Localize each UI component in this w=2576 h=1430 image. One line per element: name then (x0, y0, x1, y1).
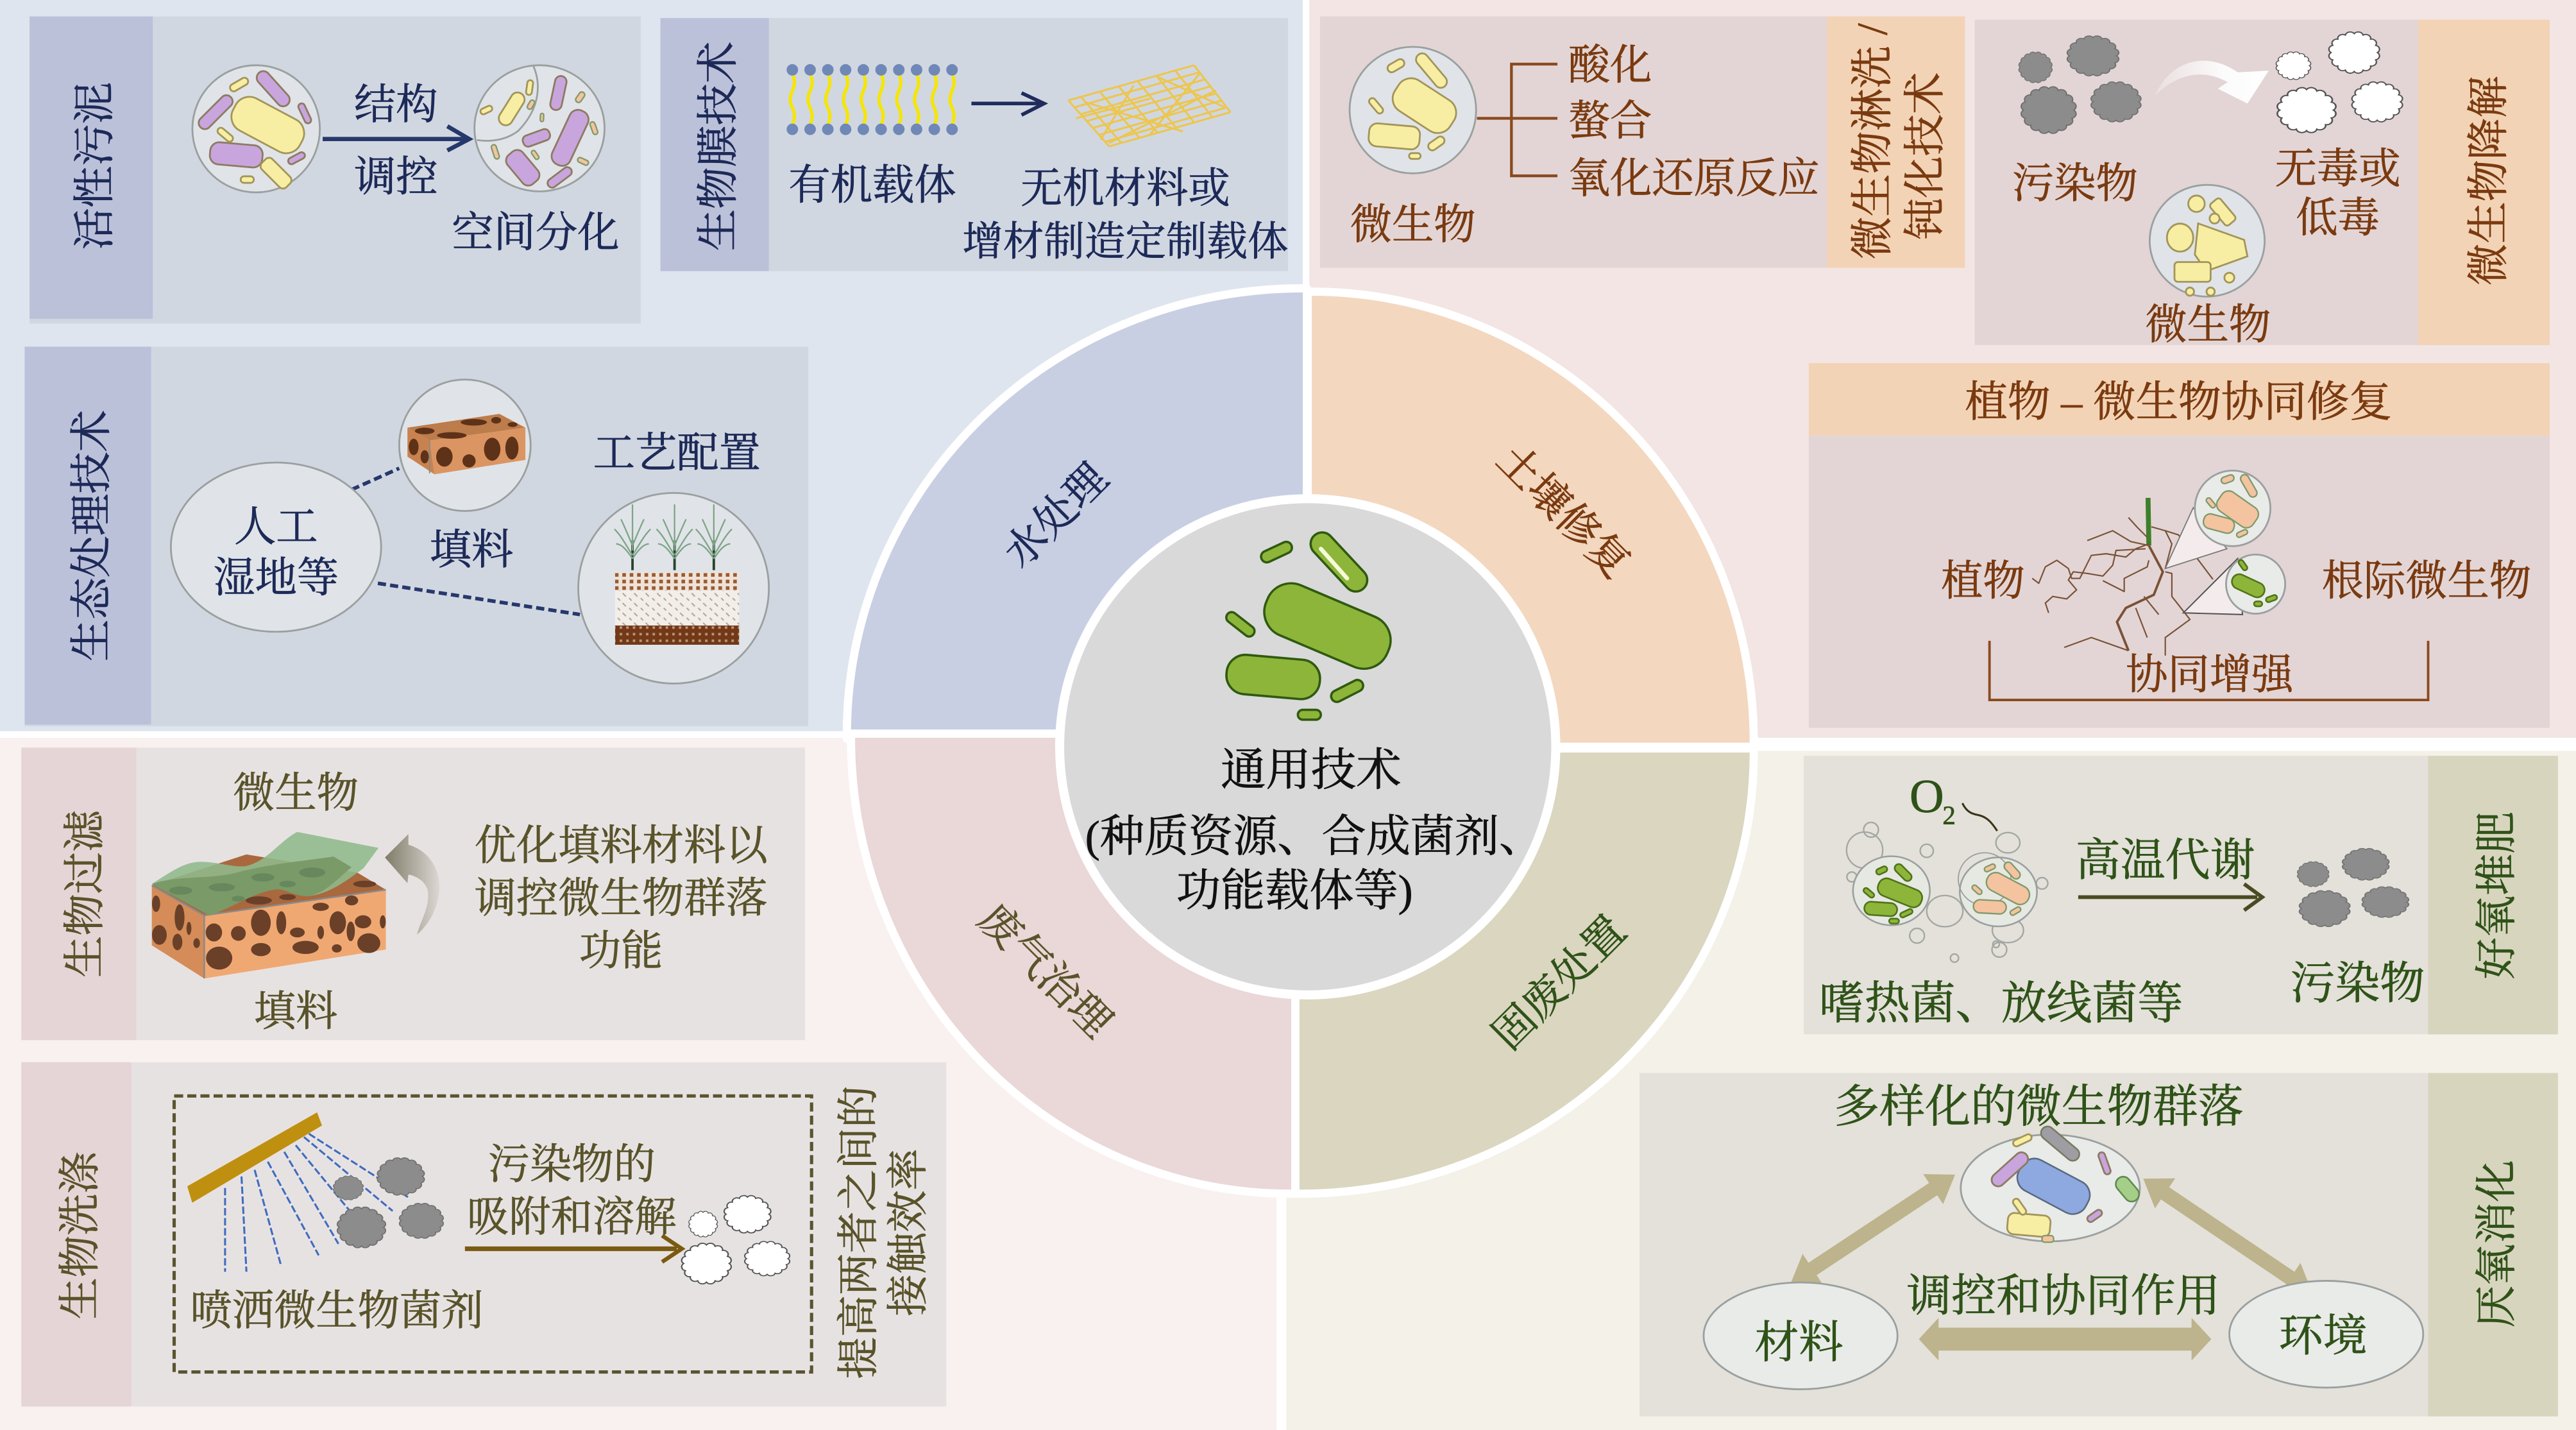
heading: 植物－微生物协同修复 (1809, 363, 2550, 436)
text: 高温代谢: 高温代谢 (2076, 837, 2255, 886)
icon: thermophile bubbles (1847, 822, 2048, 962)
label: 活性污泥 (30, 17, 153, 319)
text: 喷洒微生物菌剂: 喷洒微生物菌剂 (191, 1288, 484, 1334)
icon: grey pollutant clouds (2019, 36, 2141, 133)
label: 微生物淋洗/钝化技术: 微生物淋洗 / (1849, 23, 1896, 259)
panel: microbial degradation (1975, 20, 2550, 348)
text: 结构: 结构 (354, 82, 438, 128)
text: 有机载体: 有机载体 (788, 162, 956, 209)
icon: plant roots (2032, 498, 2213, 656)
node: constructed wetland (171, 463, 381, 632)
label: 生态处理技术 (24, 346, 151, 724)
bracket: three reactions (1477, 64, 1557, 176)
panel: biofilm technology (661, 18, 1288, 271)
node: materials (1704, 1282, 1897, 1389)
icon: yellow fibre mesh carrier (1069, 65, 1230, 146)
text: 填料: 填料 (430, 527, 513, 574)
text: 多样化的微生物群落: 多样化的微生物群落 (1834, 1082, 2244, 1132)
background: water treatment quadrant (0, 0, 1303, 731)
text: 污染物的: 污染物的 (488, 1142, 656, 1188)
node: environment (2230, 1281, 2423, 1388)
label: 生物洗涤: 生物洗涤 (57, 1151, 104, 1320)
text: 酸化: 酸化 (1568, 42, 1652, 89)
icon: microbe cell before (192, 65, 320, 192)
panel: aerobic composting (1804, 756, 2558, 1034)
text: 无毒或: 无毒或 (2275, 146, 2401, 192)
arrow: curved white transformation (2155, 61, 2269, 103)
node: environment: 环境 (2278, 1311, 2368, 1361)
segment: water treatment (847, 288, 1307, 738)
label: 厌氧消化: 厌氧消化 (2474, 1160, 2520, 1327)
icon: filler brick (399, 380, 530, 511)
icon: lipid membrane organic carrier (790, 70, 954, 130)
text: 功能载体等: 功能载体等) (1176, 866, 1413, 915)
icon: spray bar (187, 1112, 322, 1203)
label: 微生物降解: 微生物降解 (2466, 76, 2512, 285)
text: 微生物: 微生物 (2145, 302, 2271, 348)
text: 工艺配置: 工艺配置 (593, 430, 761, 477)
text: 协同增强: 协同增强 (2126, 652, 2294, 699)
panel: ecological treatment (24, 346, 808, 726)
segment: waste gas treatment: 废气治理 (969, 896, 1121, 1046)
icon: magnified rhizosphere microbes green (2183, 554, 2285, 615)
label: 好氧堆肥: 好氧堆肥 (2474, 812, 2520, 979)
icon: magnified rhizosphere microbes peach (2165, 471, 2271, 568)
icon: microbe cell spatial differentiation (475, 65, 605, 191)
text: 填料: 填料 (254, 989, 337, 1035)
bracket: synergy (1990, 641, 2428, 700)
text: 无机材料或: 无机材料或 (1021, 166, 1230, 212)
text: 污染物: 污染物 (2012, 161, 2138, 207)
panel: microbial leaching / passivation (1320, 17, 1965, 268)
segment: waste gas treatment (851, 734, 1296, 1194)
heading: 植物－微生物协同修复: 植物 – 微生物协同修复 (1965, 379, 2392, 426)
text: O2: O (1910, 770, 1944, 823)
segment: soil remediation (1308, 292, 1754, 747)
connector: wetland to process (378, 583, 580, 615)
icon: filler block with biofilm (152, 832, 386, 978)
arrow: double, microbes to materials (1781, 1159, 1965, 1298)
text: 微生物: 微生物 (233, 770, 359, 817)
arrow: structure regulation (323, 126, 469, 151)
segment: soil remediation: 土壤修复 (1487, 436, 1639, 587)
icon: spray lines (225, 1134, 409, 1272)
hub: general technology (1060, 498, 1555, 995)
icon: grey pollutant clouds (2298, 849, 2409, 926)
arrow: to white clouds (465, 1236, 682, 1262)
panel: activated sludge (30, 17, 641, 324)
label: 生物膜技术 (661, 18, 769, 271)
text: 氧化还原反应: 氧化还原反应 (1568, 156, 1820, 202)
text: 调控: 调控 (354, 155, 438, 201)
label: 活性污泥: 活性污泥 (72, 82, 119, 250)
text: 提高两者之间的: 提高两者之间的 (836, 1085, 883, 1379)
node: constructed wetland: 人工 (234, 504, 318, 550)
text: 接触效率: 接触效率 (885, 1148, 931, 1316)
icon: white clouds (682, 1196, 790, 1284)
icon: grey pollutant clouds (334, 1158, 443, 1248)
icon: oxygen squiggle (1962, 803, 1997, 831)
text: 种质资源、合成菌剂、: (种质资源、合成菌剂、 (1085, 812, 1543, 861)
segment: water treatment: 水处理 (996, 455, 1117, 577)
text: 空间分化: 空间分化 (452, 210, 620, 257)
icon: diverse microbial community (1961, 1124, 2142, 1242)
label: 生物过滤 (21, 747, 137, 1040)
label: 厌氧消化 (2428, 1073, 2558, 1417)
panel: biological scrubbing (21, 1062, 946, 1406)
text: 吸附和溶解: 吸附和溶解 (467, 1195, 677, 1241)
text: 污染物: 污染物 (2290, 960, 2425, 1009)
segment: solid waste disposal (1296, 749, 1754, 1194)
text: 嗜热菌、放线菌等: 嗜热菌、放线菌等 (1819, 979, 2183, 1029)
icon: microbe cell degrading (2149, 185, 2265, 296)
label: 生物过滤: 生物过滤 (62, 809, 108, 978)
label: 生物洗涤 (21, 1062, 131, 1406)
arrow: organic to inorganic (971, 93, 1044, 115)
icon: green bacteria (1224, 527, 1398, 720)
icon: white non-toxic clouds (2276, 32, 2403, 133)
label: 好氧堆肥 (2428, 756, 2558, 1034)
arrow: double, materials to environment (1919, 1318, 2211, 1361)
background: soil remediation quadrant (1309, 0, 2576, 738)
arrow: high temperature metabolism (2078, 884, 2262, 910)
text: 功能: 功能 (579, 928, 663, 975)
arrow: curved optimisation (385, 834, 439, 935)
node: materials: 材料 (1754, 1318, 1843, 1367)
panel: plant-microbe remediation (1809, 363, 2550, 728)
text: 优化填料材料以: 优化填料材料以 (475, 823, 769, 869)
segment: solid waste disposal: 固废处置 (1484, 908, 1635, 1059)
text: 根际微生物: 根际微生物 (2322, 559, 2531, 605)
label: 微生物降解 (2418, 20, 2550, 345)
panel: anaerobic digestion (1640, 1073, 2558, 1417)
text: 通用技术: 通用技术 (1221, 745, 1402, 796)
arrow: double, microbes to environment (2133, 1164, 2322, 1307)
text: O2: 2 (1942, 800, 1956, 830)
label: 微生物淋洗/钝化技术: 钝化技术 (1902, 72, 1949, 240)
background: waste gas quadrant (0, 738, 1276, 1430)
text: O2 (1910, 770, 1956, 830)
text: 微生物: 微生物 (1350, 202, 1476, 248)
label: 生态处理技术: 生态处理技术 (69, 410, 115, 661)
text: 植物: 植物 (1941, 559, 2025, 605)
label: 微生物淋洗/钝化技术 (1827, 17, 1965, 268)
background: solid waste quadrant (1286, 751, 2576, 1430)
node: constructed wetland: 湿地等 (213, 556, 339, 602)
text: 调控和协同作用: 调控和协同作用 (1906, 1272, 2221, 1321)
text: 低毒: 低毒 (2296, 196, 2380, 242)
icon: microbe cell yellow (1350, 47, 1476, 173)
connector: wetland to filler (352, 468, 399, 489)
text: 增材制造定制载体: 增材制造定制载体 (962, 219, 1288, 264)
text: 调控微生物群落: 调控微生物群落 (475, 876, 768, 922)
text: 螯合: 螯合 (1568, 99, 1652, 145)
label: 生物膜技术: 生物膜技术 (696, 42, 742, 251)
chart: central radial diagram (847, 288, 1754, 1194)
frame: dashed process box (174, 1096, 811, 1372)
panel: biofiltration (21, 747, 805, 1040)
icon: wetland process cross section (579, 493, 769, 683)
